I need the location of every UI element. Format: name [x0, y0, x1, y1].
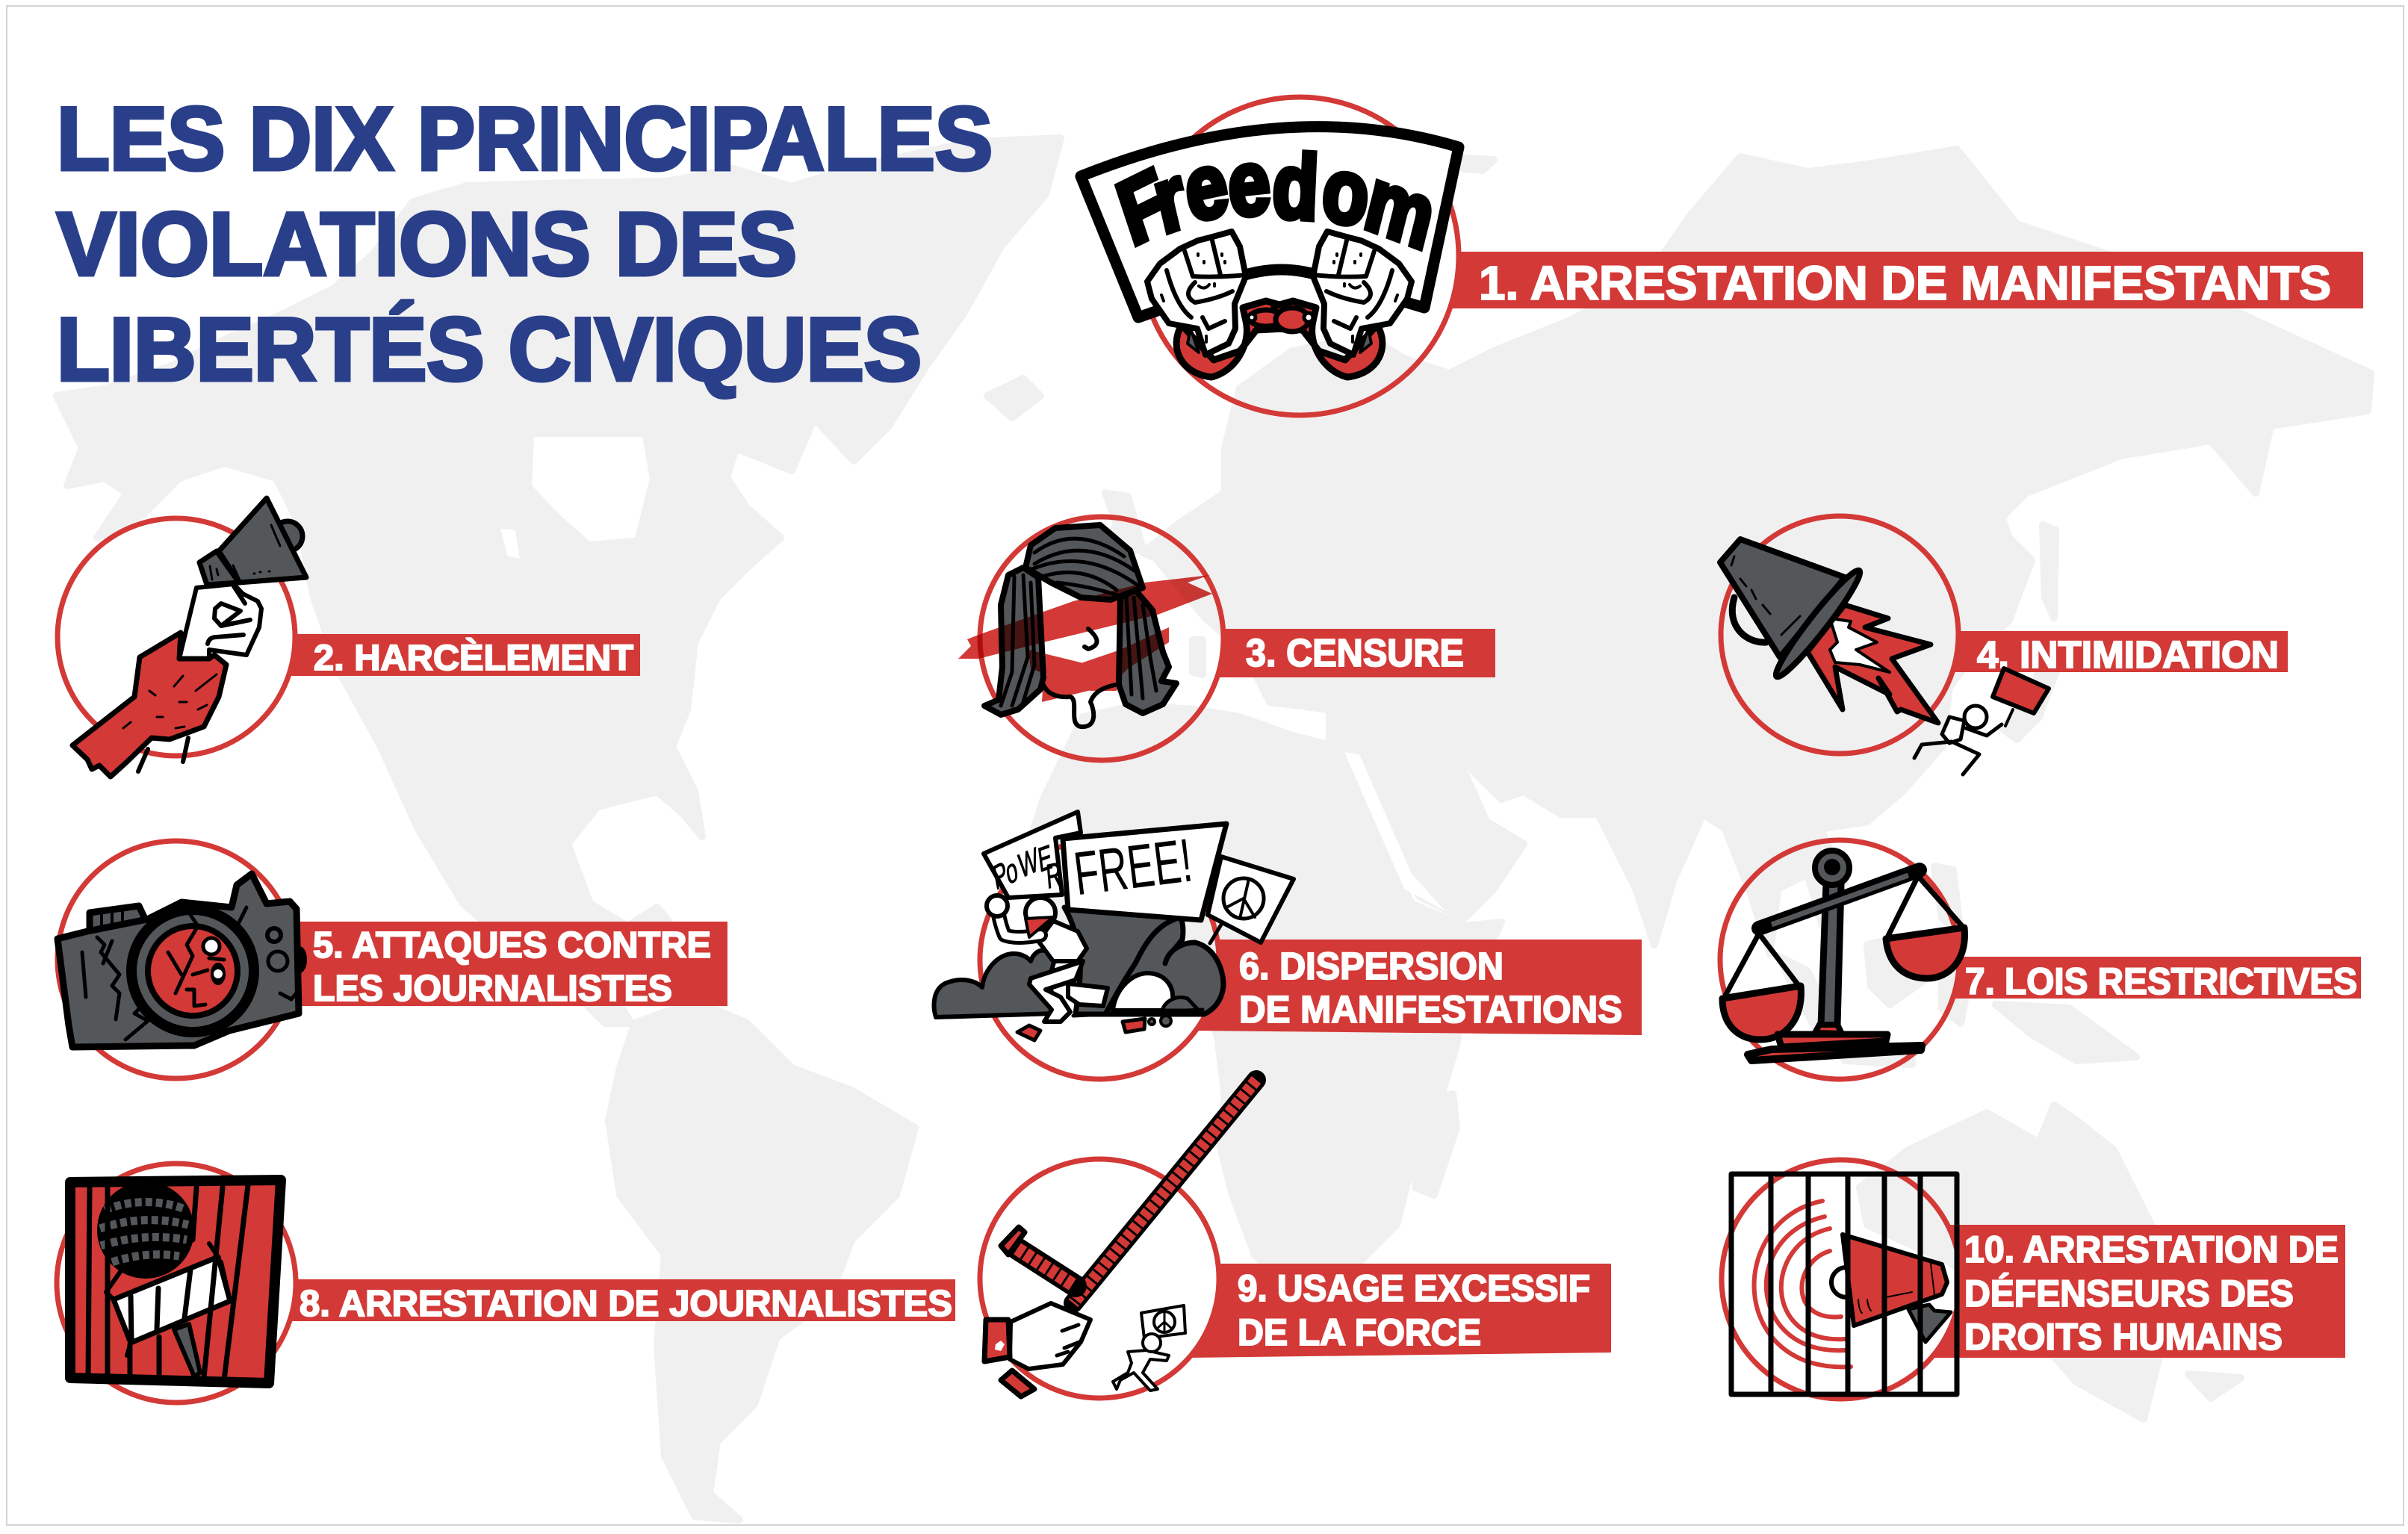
baton grip — [1017, 1249, 1076, 1286]
label text 4: 4. INTIMIDATION — [1977, 633, 2279, 676]
title — [57, 89, 993, 400]
circle 8 — [57, 1164, 296, 1403]
label bar 5 — [285, 922, 727, 1006]
label text 5: 5. ATTAQUES CONTRE — [313, 925, 711, 966]
label text 9: 9. USAGE EXCESSIF — [1238, 1267, 1590, 1309]
cell background — [70, 1180, 281, 1383]
left pan — [1722, 986, 1801, 1040]
title: VIOLATIONS DES — [57, 194, 797, 294]
red arm — [72, 633, 226, 777]
icon: megaphone blast at runner — [1720, 539, 2049, 774]
icon: freedom banner and handcuffed fists — [1081, 127, 1459, 377]
circle 1 — [1141, 97, 1459, 415]
camera lens — [131, 910, 254, 1032]
label bar 3 — [1217, 629, 1495, 677]
camera body — [58, 874, 299, 1047]
label text 9: DE LA FORCE — [1238, 1311, 1481, 1353]
circle 10 — [1722, 1160, 1961, 1399]
left hair lock — [984, 568, 1043, 715]
label bar 1 — [1450, 252, 2363, 308]
label text 8: 8. ARRESTATION DE JOURNALISTES — [300, 1284, 952, 1324]
circle 3 — [980, 517, 1223, 760]
panel: 1 arrestation de manifestants — [1081, 97, 2363, 415]
post — [1821, 884, 1841, 1025]
power placard: PoWER — [990, 838, 1063, 898]
circle 6 — [980, 840, 1219, 1079]
free placard — [1063, 824, 1226, 920]
strings — [1725, 876, 1962, 996]
bars — [88, 1185, 248, 1380]
megaphone cone — [1720, 539, 1866, 682]
label text 2: 2. HARCÈLEMENT — [314, 638, 633, 678]
cuff — [984, 1320, 1010, 1361]
circle 9 — [980, 1159, 1219, 1398]
free placard: FREE! — [1070, 827, 1196, 908]
camera dial — [90, 906, 146, 932]
ground line — [1073, 1010, 1203, 1016]
camera strap lug — [292, 946, 307, 973]
label text 9 — [1238, 1267, 1590, 1353]
sound waves — [1754, 1201, 1851, 1367]
panel: 7 lois restrictives — [1720, 840, 2361, 1079]
chin and nose — [1043, 629, 1115, 727]
label text 5: LES JOURNALISTES — [313, 969, 672, 1009]
hand — [1010, 1303, 1090, 1369]
small protester with peace sign — [1113, 1305, 1185, 1391]
label text 1: 1. ARRESTATION DE MANIFESTANTS — [1479, 256, 2331, 310]
power placard — [984, 812, 1081, 898]
label text 10: DÉFENSEURS DES — [1964, 1273, 2294, 1314]
label bar 2 — [288, 634, 640, 676]
title: LES DIX PRINCIPALES — [57, 89, 993, 189]
icon: scales of justice — [1722, 851, 1964, 1061]
circle 7 — [1720, 840, 1959, 1079]
baton shaft — [1073, 1080, 1256, 1303]
protester — [987, 895, 1108, 1022]
circle 4 — [1721, 516, 1958, 754]
debris — [1123, 1019, 1145, 1032]
label text 5 — [313, 925, 711, 1009]
red censor strokes — [958, 575, 1212, 702]
panel: 9 usage excessif de la force — [980, 1080, 1611, 1398]
label bar 10 — [1931, 1225, 2345, 1358]
banner — [1081, 127, 1459, 317]
icon: protester, smoke and placards — [934, 812, 1294, 1040]
label text 7: 7. LOIS RESTRICTIVES — [1965, 960, 2357, 1002]
icon: hand gripping megaphone — [72, 498, 306, 777]
freedom word: Freedom — [1106, 130, 1445, 269]
beam — [1759, 870, 1920, 928]
panel: 4 intimidation — [1720, 516, 2288, 774]
right pan — [1886, 928, 1964, 978]
label text 3: 3. CENSURE — [1246, 632, 1464, 675]
runner with red sign — [1914, 668, 2049, 774]
right boulder — [1105, 919, 1223, 1014]
label bar 6 — [1196, 940, 1642, 1035]
icon: microphone behind bars — [70, 1180, 281, 1383]
placard stick — [1210, 925, 1221, 943]
blast — [1807, 605, 1938, 723]
label text 10: DROITS HUMAINS — [1964, 1316, 2283, 1358]
icon: megaphone in cage — [1731, 1174, 1957, 1394]
circle 5 — [58, 841, 295, 1078]
icon: broken camera — [58, 874, 307, 1047]
white hand — [179, 584, 261, 659]
right hair lock — [1119, 590, 1176, 713]
label text 10 — [1964, 1229, 2339, 1358]
circle 2 — [58, 518, 295, 756]
mic head — [97, 1181, 194, 1279]
title: LIBERTÉS CIVIQUES — [57, 299, 922, 400]
panel: 5 attaques contre les journalistes — [58, 841, 727, 1078]
right fist — [1274, 232, 1412, 377]
mic handle — [174, 1324, 200, 1376]
label text 6: DE MANIFESTATIONS — [1239, 988, 1622, 1031]
left smoke cloud — [934, 951, 1055, 1017]
base — [1815, 1025, 1842, 1034]
chain — [1248, 308, 1313, 332]
icon: baton and hand — [984, 1080, 1256, 1397]
megaphone — [199, 498, 306, 585]
label bar 7 — [1952, 957, 2361, 999]
peace placard — [1208, 857, 1294, 943]
sticks — [138, 738, 188, 771]
top hair — [1025, 525, 1143, 600]
megaphone — [1831, 1235, 1951, 1342]
label text 10: 10. ARRESTATION DE — [1964, 1229, 2339, 1270]
panel: 8 arrestation de journalistes — [57, 1164, 955, 1403]
center smoke cloud — [1064, 907, 1183, 1014]
white stone — [1113, 973, 1173, 1010]
label bar 9 — [1189, 1264, 1611, 1358]
label bar 4 — [1952, 631, 2288, 672]
label bar 8 — [290, 1279, 955, 1321]
cage — [1731, 1174, 1957, 1394]
panel: 10 arrestation de defenseurs des droits humains — [1722, 1160, 2345, 1399]
paper — [114, 1257, 230, 1343]
left fist — [1147, 232, 1285, 377]
label text 6 — [1239, 945, 1622, 1031]
baton butt — [1001, 1370, 1034, 1397]
panel: 6 dispersion de manifestations — [934, 812, 1642, 1079]
icon: censored face — [958, 525, 1212, 727]
label text 6: 6. DISPERSION — [1239, 945, 1504, 987]
panel: 3 censure — [958, 517, 1495, 760]
panel: 2 harcelement — [58, 498, 640, 777]
